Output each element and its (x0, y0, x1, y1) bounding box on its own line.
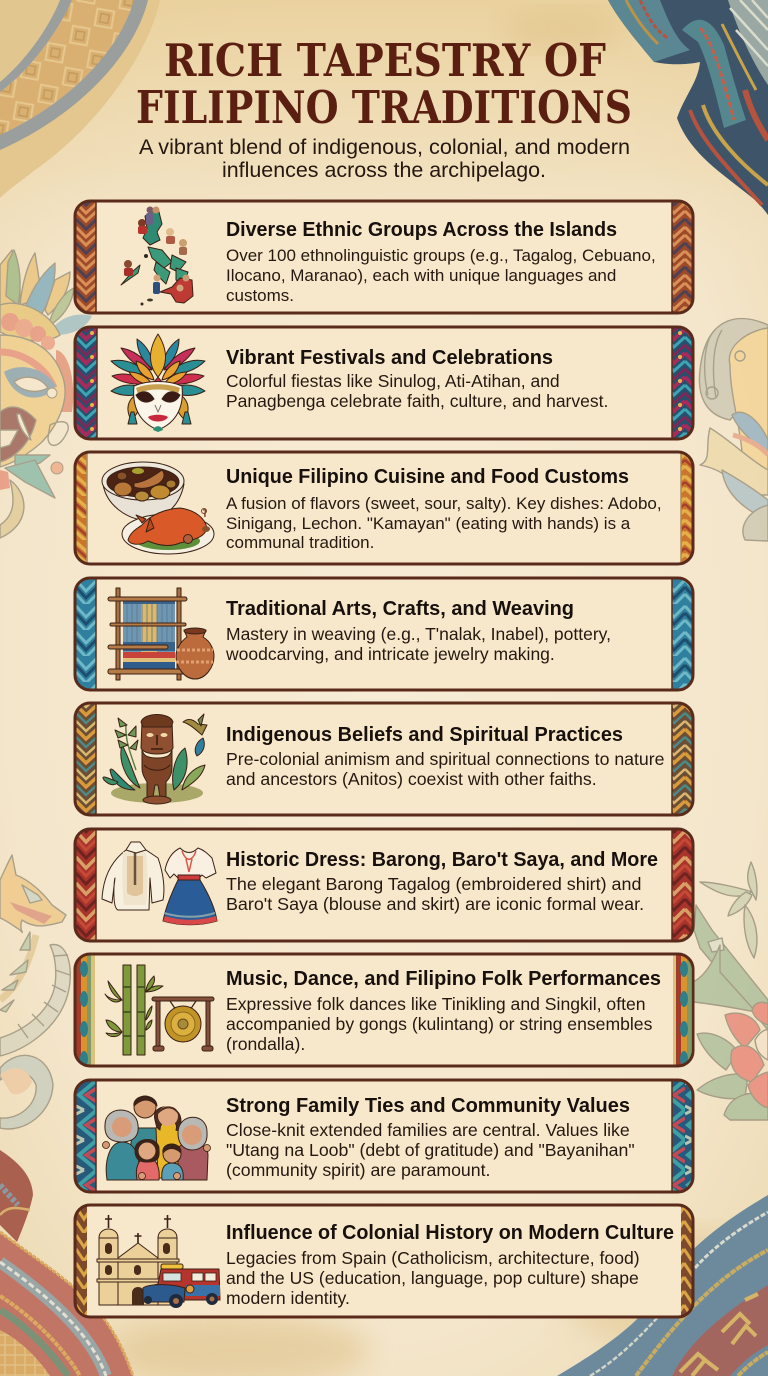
decorative bamboo and flower on lower right edge (680, 862, 768, 1120)
icon: loom and clay pot (108, 588, 214, 680)
body text (226, 994, 653, 1054)
body text: Sinigang, Lechon. "Kamayan" (eating with hands) is a (226, 514, 631, 533)
body text: modern identity. (226, 1288, 350, 1308)
body text: and the US (education, language, pop culture) shape (226, 1268, 639, 1288)
body text: A fusion of flavors (sweet, sour, salty). Key dishes: Adobo, (226, 494, 662, 513)
icon: anito figure with plants and bird (103, 714, 207, 804)
body text: customs. (226, 286, 294, 305)
panel: diverse ethnic groups (75, 201, 693, 313)
panel: arts crafts weaving (75, 578, 693, 690)
decorative dragon on lower left edge (0, 855, 70, 1129)
heading: Diverse Ethnic Groups Across the Islands (226, 218, 617, 241)
body text: Legacies from Spain (Catholicism, architecture, food) (226, 1248, 640, 1268)
subtitle (139, 136, 630, 182)
body text (226, 874, 644, 914)
body text: Pre-colonial animism and spiritual connections to nature (226, 749, 665, 769)
decorative fabric: bottom right blue cloth (557, 1195, 768, 1376)
card frame (75, 327, 693, 439)
body text: Mastery in weaving (e.g., T'nalak, Inabel), pottery, (226, 624, 611, 644)
body text (226, 1120, 635, 1180)
body text: communal tradition. (226, 533, 374, 552)
icon: festival mask (111, 334, 205, 432)
icon: bowl of adobo and lechon (102, 462, 214, 554)
body text (226, 494, 662, 552)
card frame (75, 829, 693, 941)
subtitle: A vibrant blend of indigenous, colonial, and modern (139, 136, 630, 159)
body text: "Utang na Loob" (debt of gratitude) and "Bayanihan" (226, 1140, 635, 1160)
card frame (75, 201, 693, 313)
decorative carved figure on right edge (699, 319, 768, 541)
body text: (community spirit) are paramount. (226, 1160, 490, 1180)
icon: barong and baro't saya (102, 842, 217, 925)
body text: Expressive folk dances like Tinikling and Singkil, often (226, 994, 646, 1014)
body text: The elegant Barong Tagalog (embroidered shirt) and (226, 874, 641, 894)
body text: Close-knit extended families are central. Values like (226, 1120, 630, 1140)
body text (226, 1248, 640, 1308)
heading: Historic Dress: Barong, Baro't Saya, and More (226, 848, 658, 871)
decorative mask motif on left edge (0, 250, 92, 538)
heading: Traditional Arts, Crafts, and Weaving (226, 597, 574, 620)
panel: music and dance (75, 954, 693, 1066)
body text: (rondalla). (226, 1034, 305, 1054)
body text: accompanied by gongs (kulintang) or string ensembles (226, 1014, 653, 1034)
heading: Unique Filipino Cuisine and Food Customs (226, 465, 629, 488)
decorative fabric: top left woven cloth (0, 0, 160, 198)
body text: Baro't Saya (blouse and skirt) are iconic formal wear. (226, 894, 644, 914)
panel: colonial history (75, 1205, 693, 1317)
title (136, 34, 632, 134)
heading: Indigenous Beliefs and Spiritual Practices (226, 723, 623, 746)
icon: bamboo and gong (105, 965, 214, 1055)
card frame (75, 578, 693, 690)
body text (226, 371, 608, 411)
panel: filipino cuisine (75, 452, 693, 564)
card frame (75, 452, 693, 564)
panel: indigenous beliefs (75, 703, 693, 815)
body text: woodcarving, and intricate jewelry making. (225, 644, 555, 664)
card frame (75, 954, 693, 1066)
body text (226, 246, 656, 305)
heading: Influence of Colonial History on Modern Culture (226, 1221, 674, 1244)
body text: Over 100 ethnolinguistic groups (e.g., Tagalog, Cebuano, (226, 246, 656, 265)
decorative fabric: bottom left red cloth (0, 1150, 133, 1376)
body text (225, 624, 611, 664)
card frame (75, 1205, 693, 1317)
panel: vibrant festivals (75, 327, 693, 439)
body text: Panagbenga celebrate faith, culture, and harvest. (226, 391, 608, 411)
decorative fabric: top right striped cloth (608, 0, 768, 215)
card frame (75, 1080, 693, 1192)
panel: family ties (75, 1080, 693, 1192)
body text: Ilocano, Maranao), each with unique languages and (226, 266, 616, 285)
heading: Music, Dance, and Filipino Folk Performances (226, 967, 661, 990)
subtitle: influences across the archipelago. (222, 159, 546, 182)
heading: Strong Family Ties and Community Values (226, 1094, 630, 1117)
body text (226, 749, 665, 789)
body text: Colorful fiestas like Sinulog, Ati-Atihan, and (226, 371, 560, 391)
title: FILIPINO TRADITIONS (136, 81, 632, 134)
icon: church and jeepney (97, 1215, 220, 1308)
heading: Vibrant Festivals and Celebrations (226, 346, 553, 369)
icon: extended family (102, 1096, 210, 1180)
title: RICH TAPESTRY OF (164, 34, 606, 87)
body text: and ancestors (Anitos) coexist with other faiths. (226, 769, 597, 789)
card frame (75, 703, 693, 815)
icon: Philippine map with people (121, 206, 193, 306)
panel: historic dress (75, 829, 693, 941)
